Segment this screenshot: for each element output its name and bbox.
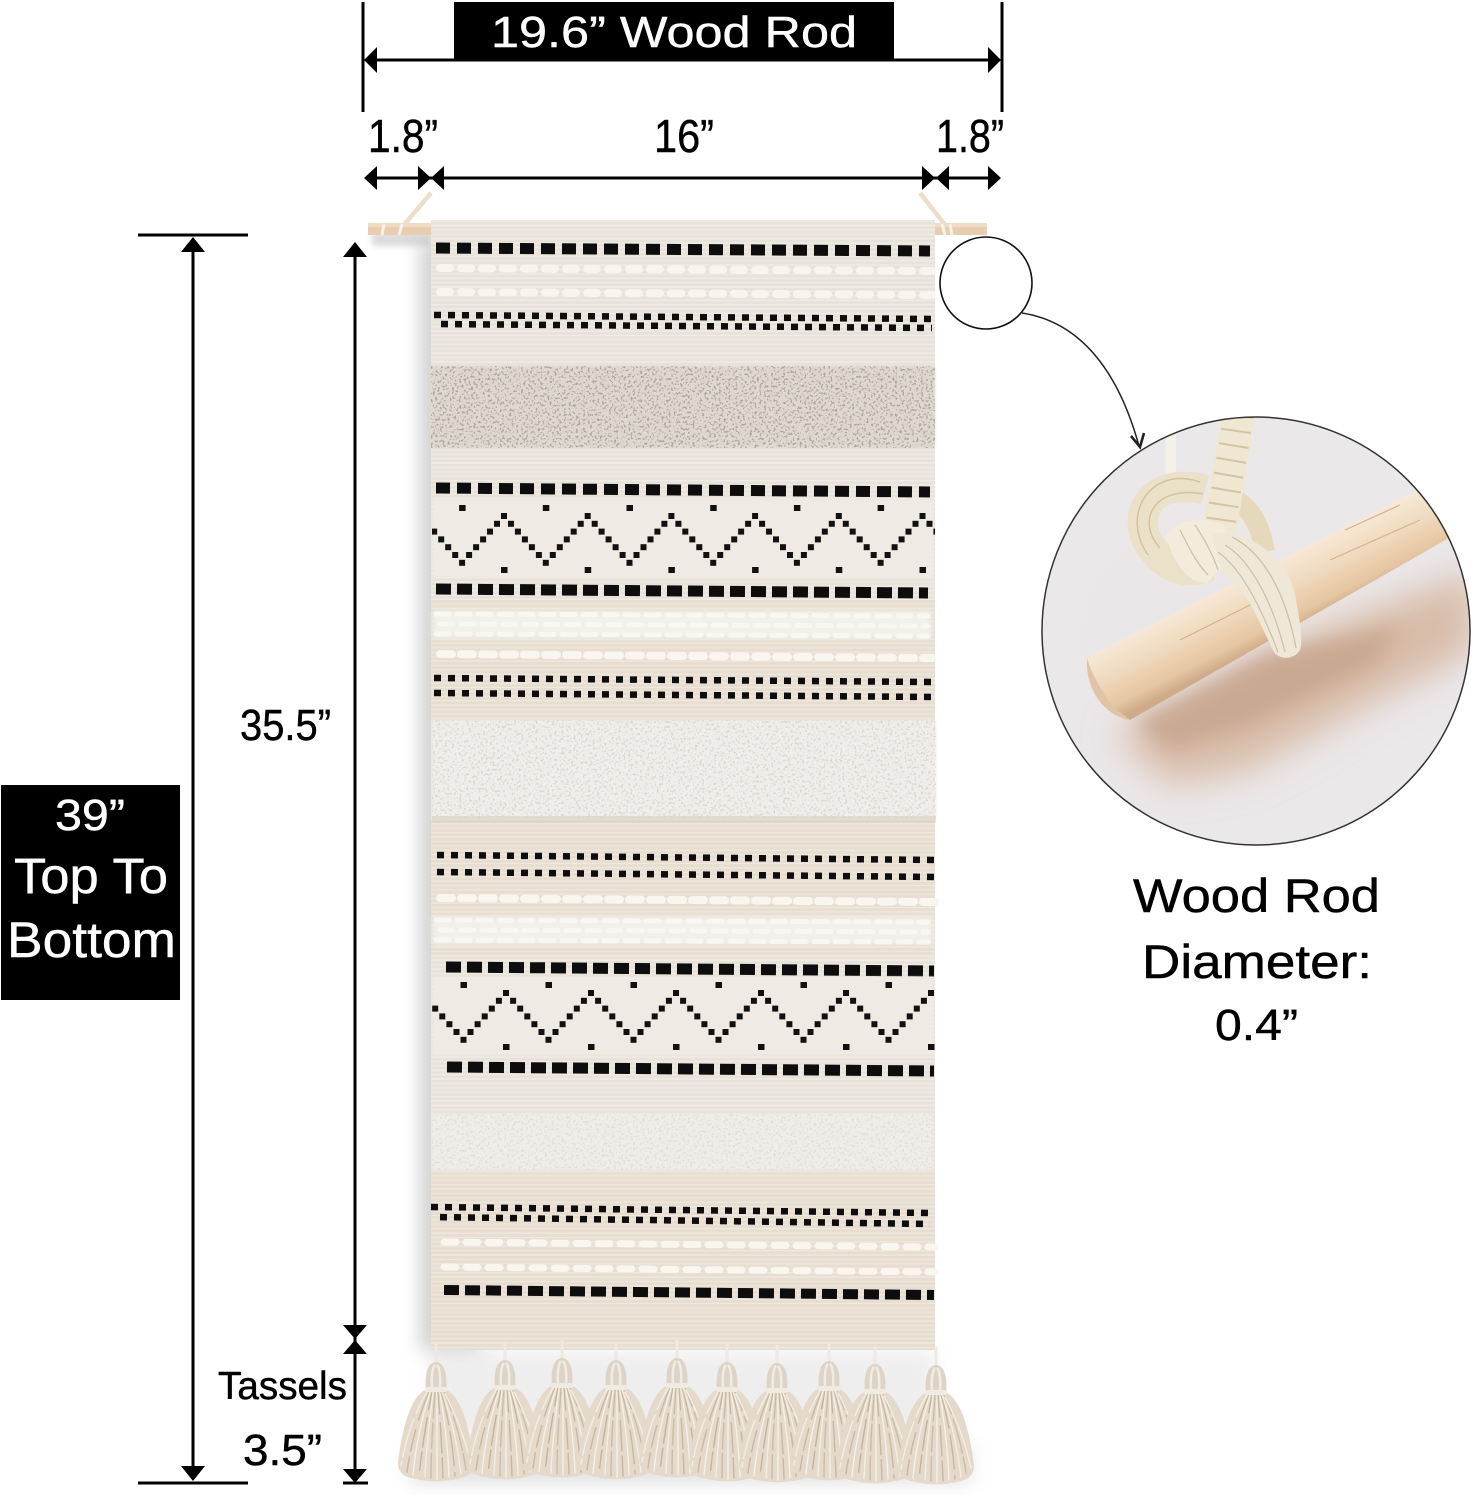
arrow line <box>370 58 996 62</box>
bottom: Bottom <box>7 912 176 968</box>
arrowheads <box>181 237 205 1481</box>
soft drop shadow of wall hanging <box>372 232 970 1483</box>
end ticks <box>363 2 1002 112</box>
39 inch: 39” <box>55 791 125 840</box>
tassel 2 <box>467 1342 543 1479</box>
tassel 6 <box>689 1344 765 1481</box>
rope right loop <box>1232 498 1265 552</box>
caption line 1: Wood Rod <box>1133 869 1380 922</box>
wood rod <box>368 223 987 235</box>
wood rod diameter caption <box>1133 869 1380 1050</box>
35.5 inch label: 35.5” <box>240 701 331 750</box>
highlight circle at rod end <box>940 237 1032 329</box>
shaggy beige band <box>431 366 935 448</box>
top to: Top To <box>14 848 168 904</box>
caption line 2: Diameter: <box>1142 935 1372 988</box>
bottom beige weave section <box>431 1170 935 1350</box>
white woven band lower <box>433 917 933 944</box>
rug height dimension <box>343 242 368 1483</box>
upper rope strand <box>1220 415 1238 530</box>
tassels label: Tassels <box>218 1365 347 1408</box>
39 inch label box <box>1 785 180 1000</box>
segment arrows <box>364 166 1001 190</box>
photo circle outline <box>1042 417 1470 845</box>
wall hanging rug <box>431 220 936 1350</box>
fabric backdrop <box>1040 415 1472 847</box>
top black dash row <box>436 248 930 251</box>
fourth black dash row <box>446 967 934 971</box>
fifth black dash row <box>447 1067 934 1071</box>
tassel 10 <box>898 1347 974 1484</box>
shaggy white band <box>432 720 936 823</box>
arrowheads <box>364 47 1001 73</box>
middle double black dots lower <box>437 855 935 877</box>
beige weave sections <box>431 600 935 720</box>
rug base <box>431 220 935 1350</box>
white stitch row lower <box>440 898 935 902</box>
tassel 7 <box>739 1345 815 1482</box>
overall height dimension <box>138 235 248 1483</box>
tassel 1 <box>398 1344 474 1481</box>
knot body <box>1166 520 1227 582</box>
segment labels <box>368 110 1004 162</box>
black label box <box>454 2 894 60</box>
right margin label: 1.8” <box>936 110 1004 162</box>
back rope left <box>1166 434 1176 474</box>
rod grain <box>1180 505 1420 640</box>
top width dimension: 19.6 inch wood rod <box>363 2 1002 112</box>
top double black dots <box>434 315 932 328</box>
second black dash row <box>436 488 930 492</box>
rod end <box>1087 658 1130 720</box>
zigzag pattern lower <box>432 976 935 1056</box>
caption line 3: 0.4” <box>1215 1001 1298 1050</box>
cord wrap strands <box>1180 525 1296 652</box>
rope loop back <box>1143 487 1210 570</box>
tassel 4 <box>578 1342 654 1479</box>
label text: 19.6” Wood Rod <box>491 8 857 57</box>
rod <box>1087 490 1448 720</box>
hanging cords <box>403 193 946 226</box>
left margin label: 1.8” <box>368 110 438 162</box>
vertical line <box>192 245 194 1472</box>
tassel 5 <box>639 1340 715 1477</box>
rope twist detail <box>1220 415 1238 530</box>
zigzag pattern upper <box>432 498 935 578</box>
third black dash row <box>436 589 928 593</box>
zoomed photo of wood rod and knot <box>1040 415 1473 847</box>
center width label: 16” <box>654 110 714 162</box>
tassels <box>398 1340 974 1484</box>
bottom double black dots <box>431 1207 930 1224</box>
white stitch rows top <box>440 268 932 295</box>
white stitch row <box>440 654 932 658</box>
ticks <box>138 235 248 1483</box>
middle double black dots upper <box>434 678 932 697</box>
bottom black dash row <box>444 1290 934 1295</box>
shaggy white band lower <box>432 1114 932 1170</box>
lower beige weave section <box>431 820 935 955</box>
curved callout arrow <box>1022 313 1144 447</box>
cord wrap over rod <box>1212 533 1301 658</box>
tassel 8 <box>791 1343 867 1480</box>
peach shadow <box>1115 570 1473 785</box>
white woven band upper <box>433 611 931 638</box>
darker shadow <box>1135 625 1400 750</box>
bottom white stitch rows <box>444 1242 935 1272</box>
rope loop strands <box>1137 479 1203 555</box>
3.5 inch label: 3.5” <box>243 1426 322 1475</box>
tassel 9 <box>837 1346 913 1483</box>
tassel 3 <box>524 1340 600 1477</box>
